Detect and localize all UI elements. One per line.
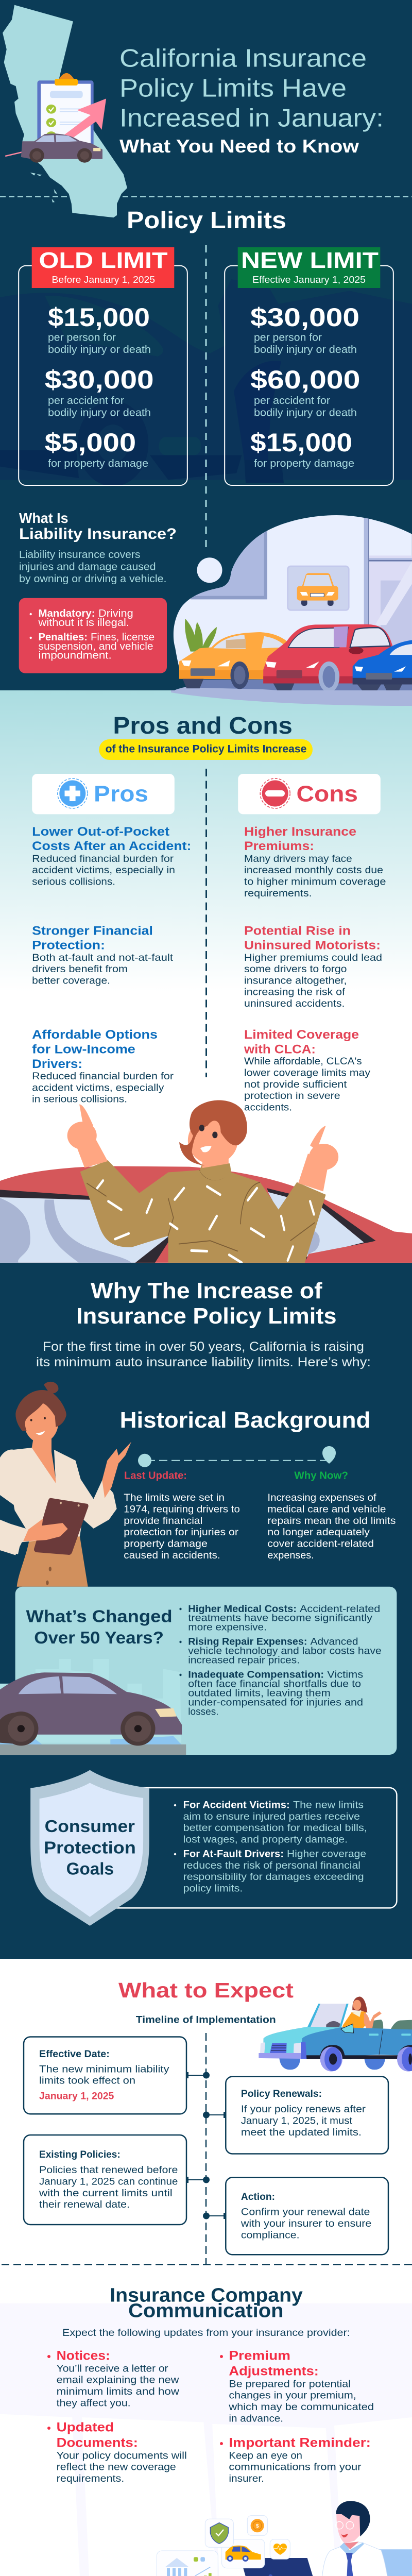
item: updated documents: Documents: [57,2435,138,2450]
rear wheels [279,2058,300,2070]
old limit per person [48,303,151,355]
red car [263,624,393,684]
con 1: requirements. [244,888,312,899]
con 1: Premiums: [244,839,314,853]
change bullets: Rising Repair Expenses: [188,1636,307,1648]
goals bullets: Higher coverage [287,1849,366,1860]
goals bullets: better compensation for medical bills, [183,1823,367,1834]
con 2: uninsured accidents. [244,998,345,1009]
card: existing policies: Policies that renewed before [39,2165,178,2176]
card: bank and chart [157,2551,218,2576]
front wheels [320,2045,345,2058]
intro line: Expect the following updates from your insurance provider: [62,2328,350,2338]
driver [341,1996,382,2032]
card: policy renewals [226,2077,388,2154]
pro 2: drivers benefit from [32,964,128,975]
panel: mandatory and penalties: suspension, and vehicle [38,641,153,652]
panel: mandatory and penalties: Mandatory: [38,608,95,619]
item: notices [47,2348,179,2409]
title: Increased in January: [119,104,384,132]
item: premium adjustments: changes in your premium, [229,2391,356,2401]
pro 2: Stronger Financial [32,924,153,938]
title [119,44,384,157]
icon: minus [260,778,290,808]
new limit per accident: $60,000 [250,365,360,394]
con 2: insurance altogether, [244,975,347,986]
panel: mandatory and penalties: Driving [98,608,133,619]
last update column: 1974, requiring drivers to [124,1504,240,1515]
new limit badge [238,247,380,288]
pro 3: for Low-Income [32,1043,135,1057]
card: coin [247,2516,267,2535]
intro text: For the first time in over 50 years, California is raising [43,1340,364,1354]
change bullets: Accident-related [300,1603,380,1615]
timeline connectors [183,2072,229,2219]
pro 3: Drivers: [32,1057,82,1071]
pro 2: better coverage. [32,975,110,986]
picture frame with orange car [288,566,349,610]
why now column: repairs mean the old limits [267,1516,396,1527]
change bullets: often face financial shortfalls due to [188,1678,361,1689]
old limit heading: OLD LIMIT [39,248,168,273]
goals bullets: For At-Fault Drivers: [183,1849,284,1860]
new limit per person [250,303,359,355]
heading: insurance company communication: Insurance Company [110,2284,303,2306]
change bullets: vehicle technology and labor costs have [188,1646,382,1657]
card: action: compliance. [241,2230,300,2241]
goals bullets: lost wages, and property damage. [183,1834,348,1845]
plant [185,619,217,652]
goals bullets [174,1800,367,1894]
card: shield [205,2519,233,2547]
con 3: While affordable, CLCA's [244,1056,362,1067]
ground shadow over pros section [171,690,412,706]
change bullets [179,1603,382,1717]
panel: pros header [32,774,175,814]
pro 3: Reduced financial burden for [32,1071,174,1082]
new limit heading: NEW LIMIT [241,248,379,273]
con 2: Higher premiums could lead [244,953,382,963]
illustration: woman with clipboard [0,1382,131,1587]
illustration: woman in convertible [259,1996,412,2072]
con 3: accidents. [244,1103,292,1113]
item: notices: Notices: [57,2348,110,2363]
last update column: protection for injuries or [124,1527,239,1538]
panel: what's changed [0,1587,397,1755]
item: premium adjustments: Premium [229,2348,290,2363]
panel: mandatory and penalties: Fines, license [91,632,154,643]
change bullets: Higher Medical Costs: [188,1603,297,1615]
title: Policy Limits Have [119,74,347,102]
pro 1: serious collisions. [32,877,115,887]
old limit per person: per person for [48,332,116,343]
old limit property: $5,000 [45,428,136,457]
last update column: Last Update: [124,1470,187,1482]
item: important reminder [220,2435,371,2484]
intro text [36,1340,371,1369]
head and hair [188,1117,238,1164]
card: effective date: January 1, 2025 [39,2091,114,2102]
con 2: Uninsured Motorists: [244,939,381,952]
item: updated documents [47,2420,187,2484]
item: notices: minimum limits and how [57,2386,179,2397]
clipboard [34,1498,89,1555]
windshield [307,2004,349,2028]
pro 3: Affordable Options [32,1028,158,1042]
new limit property [250,428,354,469]
pro 2: Both at-fault and not-at-fault [32,953,174,963]
shield title: Goals [66,1859,114,1878]
panel: consumer protection goals [30,1770,397,1926]
what is liability insurance text: injuries and damage caused [19,562,156,573]
old limit date: Before January 1, 2025 [52,275,155,285]
section background: dark intro [0,0,412,690]
skirt [17,1536,88,1587]
con 3: with CLCA: [244,1043,316,1057]
pro 1: accident victims, especially in [32,865,175,876]
neck [202,1157,229,1172]
item: updated documents: Updated [57,2420,114,2434]
item: updated documents: requirements. [57,2473,124,2484]
last update column: caused in accidents. [124,1550,220,1561]
why now column: Why Now? [294,1470,348,1482]
goals bullets: responsibility for damages exceeding [183,1872,364,1883]
change bullets: Inadequate Compensation: [188,1669,324,1680]
title: California Insurance [119,44,367,72]
car body [264,2027,412,2058]
card: existing policies: with the current limits until [39,2188,173,2199]
card: action [226,2177,388,2255]
illustration: car showroom [173,515,412,690]
new limit date: Effective January 1, 2025 [252,275,366,285]
heading: Pros and Cons: Pros and Cons [113,712,293,739]
item: updated documents: reflect the new coverage [57,2462,176,2473]
item: notices: You’ll receive a letter or [57,2363,168,2374]
con 3: protection in severe [244,1091,340,1101]
card: policy renewals: meet the updated limits. [241,2127,362,2138]
heading: Policy Limits: Policy Limits [127,207,286,233]
car [21,133,102,163]
pro 1: Lower Out-of-Pocket [32,825,169,839]
con 3 [244,1028,371,1113]
head and hair [24,1401,58,1443]
start marker [138,1454,151,1467]
card: existing policies: their renewal date. [39,2199,130,2210]
new limit per accident: bodily injury or death [254,407,357,418]
old limit property [45,428,148,469]
neck and chest [32,1438,57,1485]
map of California [3,5,127,217]
face [336,2513,360,2544]
section background: pros and cons [0,690,412,992]
why now column [267,1470,396,1561]
pro 3: in serious collisions. [32,1094,127,1105]
card: car [222,2539,265,2568]
card: effective date: Effective Date: [39,2049,110,2060]
far seats [366,2020,412,2030]
timeline markers [138,1446,336,1467]
new limit per accident [250,365,360,418]
con 2 [244,924,382,1009]
heading: why the increase [76,1278,337,1329]
goals bullets: aim to ensure injured parties receive [183,1811,360,1822]
goals bullets: The new limits [293,1800,364,1811]
why now column: Increasing expenses of [267,1493,376,1503]
what is liability insurance text: Liability insurance covers [19,549,140,561]
panel: mandatory and penalties: impoundment. [38,650,112,662]
what is liability insurance text [19,510,177,585]
card: heart [270,2539,290,2559]
card: coin: $ [256,2523,259,2529]
heading: insurance company communication [110,2284,303,2321]
goals bullets: reduces the risk of personal financial [183,1860,360,1871]
new limit property: for property damage [254,458,354,469]
con 1: Higher Insurance [244,825,356,839]
panel: cons header [238,774,381,814]
end pin marker [322,1446,336,1464]
new limit per accident: per accident for [254,395,330,406]
pro 3: accident victims, especially [32,1082,164,1093]
illustration: agent at laptop [157,2501,412,2576]
con 2: some drivers to forgo [244,964,347,975]
goals bullets: For Accident Victims: [183,1800,290,1811]
last update column: provide financial [124,1516,202,1527]
shield [30,1770,149,1926]
item: important reminder: Keep an eye on [229,2450,302,2461]
panel: mandatory and penalties: Penalties: [38,632,88,643]
what is liability insurance text: What Is [19,510,68,526]
con 2: increasing the risk of [244,987,346,998]
orange car [179,632,294,680]
card: effective date: The new minimum liability [39,2064,169,2075]
item: premium adjustments: which may be communicated [228,2402,374,2413]
item: premium adjustments [220,2348,374,2424]
heading: insurance company communication: Communication [128,2300,283,2321]
why now column: expenses. [267,1550,314,1561]
con 1 [244,825,386,899]
raised hand [102,1442,131,1498]
last update column: property damage [124,1538,208,1550]
card: existing policies: Existing Policies: [39,2149,121,2160]
change bullets: losses. [188,1706,218,1717]
bumper and sill [306,2055,412,2059]
why now column: no longer adequately [267,1527,370,1538]
pink road line [5,152,24,156]
con 1: Many drivers may face [244,854,352,865]
blue car [353,640,412,684]
item: premium adjustments: in advance. [229,2413,283,2424]
item: notices: email explaining the new [57,2375,179,2386]
new limit per person: per person for [254,332,322,343]
what is liability insurance text: Liability Insurance? [19,526,177,543]
old limit per accident: bodily injury or death [48,407,151,418]
timeline vertical dashes [205,2033,207,2264]
office background [0,2303,412,2576]
heading: what to expect: Timeline of Implementation [136,2014,276,2026]
item: important reminder: Important Reminder: [229,2435,371,2450]
intro text: its minimum auto insurance liability limits. Here’s why: [36,1355,371,1369]
change bullets: increased repair prices. [188,1654,300,1666]
con 3: Limited Coverage [244,1028,359,1042]
item: premium adjustments: Adjustments: [229,2364,319,2378]
islands [30,173,57,202]
new limit per person: $30,000 [250,303,359,332]
title: What You Need to Know [119,135,359,157]
horizontal section divider [2,2264,412,2265]
new limit per person: bodily injury or death [254,344,357,355]
red car [0,1166,412,1263]
showroom blob [165,515,412,670]
change bullets: treatments have become significantly [188,1613,372,1624]
old limit per person: $15,000 [48,303,150,332]
section background: what to expect [0,1959,412,2576]
subheading pill [99,739,313,760]
con 1: increased monthly costs due [244,865,383,876]
heading: what to expect: What to Expect [118,1978,294,2002]
new limit property: $15,000 [250,428,352,457]
car windows [0,1190,174,1263]
chair [380,2549,412,2576]
old limit per accident [45,365,154,418]
shield title [44,1817,136,1878]
blouse [0,1448,117,1554]
card: effective date: limits took effect on [39,2076,135,2087]
pro 1: Costs After an Accident: [32,839,191,853]
old limit badge [32,247,174,288]
last update column: The limits were set in [124,1493,225,1503]
illustration: purple car in city [0,1659,186,1755]
old limit per accident: $30,000 [45,365,154,394]
arms and hands [75,1132,108,1168]
faint car silhouette behind limits [0,279,412,486]
old limit property: for property damage [48,458,148,469]
cons label: Cons [297,781,358,807]
old limit per person: bodily injury or death [48,344,151,355]
heading [26,1607,173,1647]
shield title: Protection [44,1838,136,1857]
sweater [80,1160,326,1263]
card: policy renewals: If your policy renews after [241,2104,366,2115]
arrow [64,98,106,138]
old limit per accident: per accident for [48,395,124,406]
card: effective date [24,2037,186,2114]
panel: mandatory and penalties [19,598,167,673]
clipboard [37,73,94,146]
panel: old limit [19,247,187,485]
holding hand [23,1519,68,1541]
heading: historical background: Historical Background [120,1408,370,1433]
pros label: Pros [94,781,148,807]
heading: Over 50 Years? [34,1628,164,1647]
panel: mandatory and penalties: without it is illegal. [38,617,129,629]
collar and tie [339,2541,364,2554]
item: premium adjustments: Be prepared for potential [229,2379,351,2389]
pro 2: Protection: [32,939,105,952]
shield title: Consumer [45,1817,135,1836]
heading: What’s Changed [26,1607,173,1626]
heading: why the increase: Why The Increase of [91,1278,322,1303]
heading: what to expect [118,1978,294,2026]
why now column: cover accident-related [267,1538,374,1550]
card: existing policies: January 1, 2025 can continue [39,2176,178,2187]
center dashed divider [205,245,207,552]
card: action: with your insurer to ensure [241,2218,371,2229]
pro 1: Reduced financial burden for [32,854,174,865]
panel: new limit [225,247,393,485]
parked cars [171,619,412,706]
card: existing policies [24,2135,186,2225]
laptop [241,2558,341,2576]
pro 1 [32,825,191,887]
change bullets: more expensive. [188,1622,267,1633]
heading: why the increase: Insurance Policy Limits [76,1303,337,1329]
change bullets: Victims [327,1669,363,1680]
icon: plus [58,778,88,808]
last update column [124,1470,240,1561]
why now column: medical care and vehicle [267,1504,386,1515]
center dashed divider [205,769,207,1077]
con 1: to higher minimum coverage [244,877,386,887]
divider dashed line [0,196,412,197]
item: important reminder: insurer. [229,2473,264,2484]
change bullets: under-compensated for injuries and [188,1697,363,1708]
card: action: Action: [241,2192,275,2202]
what is liability insurance text: by owning or driving a vehicle. [19,573,167,585]
shirt [321,2543,391,2576]
con 3: lower coverage limits may [244,1068,371,1079]
change bullets: outdated limits, leaving them [188,1688,331,1699]
section background: why increase [0,1263,412,1959]
pro 3 [32,1028,174,1105]
card: action: Confirm your renewal date [241,2207,370,2218]
item: notices: they affect you. [57,2398,131,2409]
item: important reminder: communications from your [229,2462,362,2473]
change bullets: Advanced [310,1636,358,1648]
illustration: California map with clipboard and car [3,5,127,217]
pro 2 [32,924,174,986]
subheading pill: of the Insurance Policy Limits Increase [106,743,306,755]
goals bullets: policy limits. [183,1884,243,1894]
con 3: not provide sufficient [244,1079,347,1090]
con 2: Potential Rise in [244,924,351,938]
card: policy renewals: Policy Renewals: [241,2089,322,2099]
illustration: woman pointing from red car [0,1100,412,1263]
card: policy renewals: January 1, 2025, it must [241,2115,353,2126]
item: updated documents: Your policy documents will [57,2450,187,2461]
